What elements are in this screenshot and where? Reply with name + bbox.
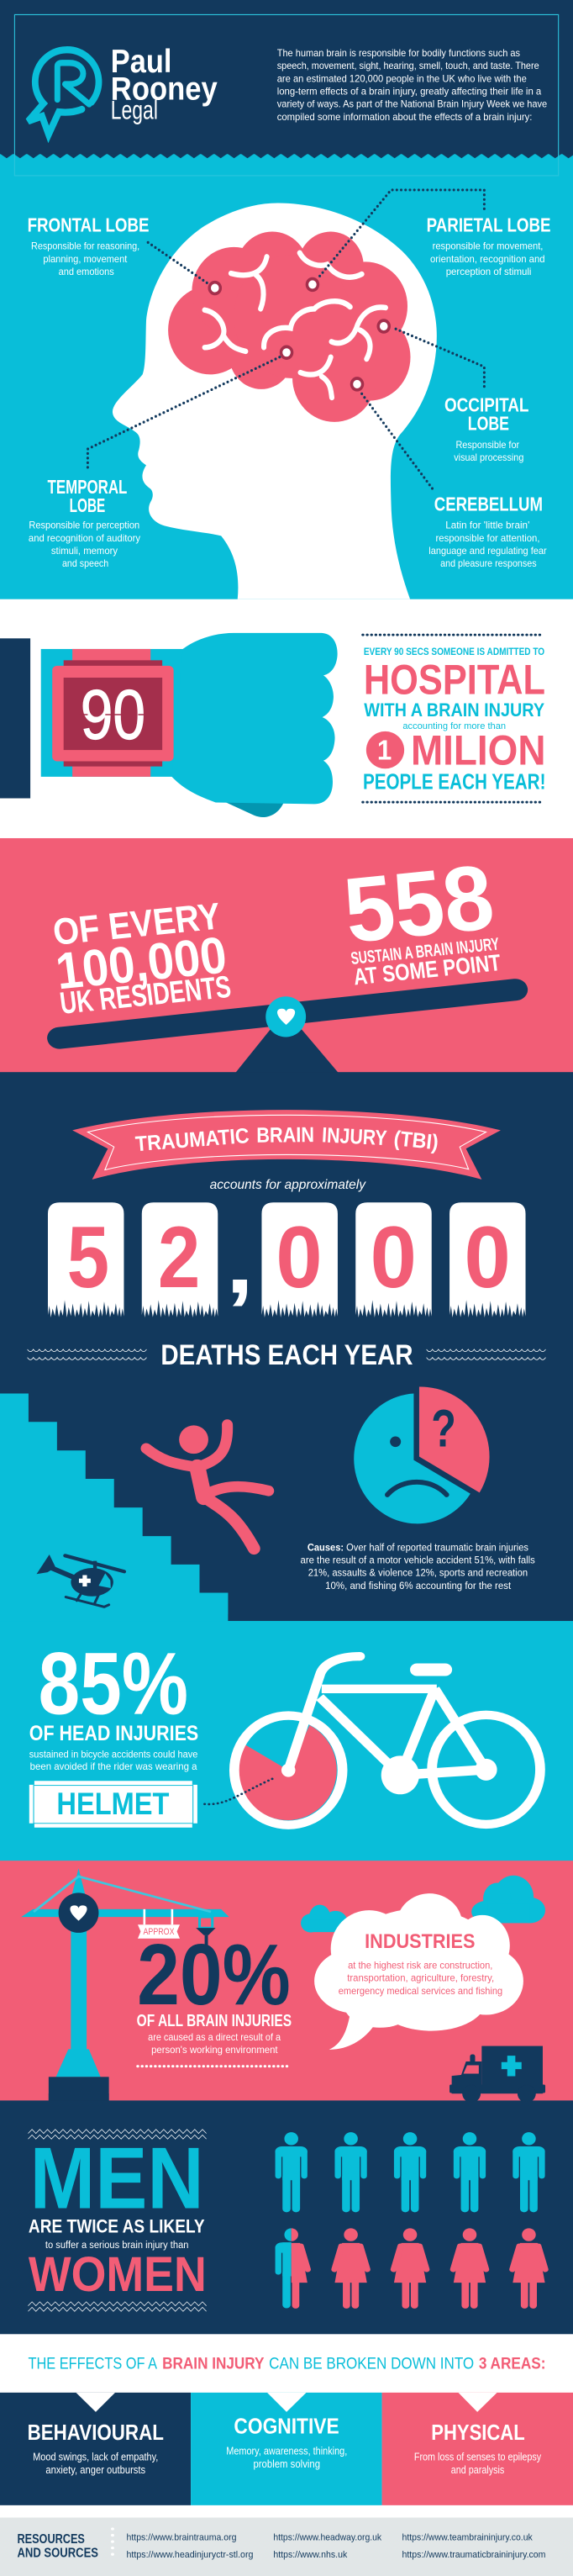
text: of every 100,000: UK RESIDENTS — [58, 969, 233, 1021]
number cards: 52,000: 0 — [276, 1208, 323, 1306]
label: frontal lobe: FRONTAL LOBE — [28, 214, 149, 236]
label: temporal lobe: LOBE — [70, 494, 105, 516]
stat: 20%: 20% — [137, 1926, 291, 2023]
label: cerebellum — [428, 493, 547, 569]
text: causes: are the result of a motor vehicle accident 51%, with falls — [301, 1555, 535, 1566]
panel: cognitive: COGNITIVE — [234, 2415, 339, 2438]
label: frontal lobe: planning, movement — [43, 254, 128, 265]
footer: resources and sources: RESOURCES — [17, 2531, 85, 2547]
banner title: BRAIN — [256, 1123, 314, 1148]
label: cerebellum: and pleasure responses — [440, 558, 537, 569]
helmet plaque: HELMET — [56, 1787, 169, 1821]
label: occipital lobe: visual processing — [454, 452, 523, 463]
label: cerebellum: Latin for 'little brain' — [445, 520, 529, 531]
label: cerebellum: responsible for attention, — [436, 533, 539, 544]
footer: resources and sources: https://www.nhs.uk — [273, 2549, 348, 2560]
logo — [28, 43, 218, 135]
brain folds — [205, 253, 386, 398]
number cards: 52,000 — [48, 1202, 526, 1317]
text block: hospital statistic: 1 — [377, 735, 392, 766]
intro text: The human brain is responsible for bodily functions such as — [277, 48, 520, 59]
company name: Rooney — [111, 71, 218, 107]
panel: physical: PHYSICAL — [431, 2420, 525, 2444]
panel: behavioural: BEHAVIOURAL — [28, 2420, 164, 2444]
subtitle: accounts for approximately — [210, 1178, 366, 1192]
text: 558: 558 — [339, 845, 499, 962]
speech bubble: industries: transportation, agriculture, forestry, — [347, 1972, 494, 1983]
label: temporal lobe: and speech — [62, 558, 108, 569]
panel: men vs women — [0, 2085, 573, 2576]
illustration: balance scale — [60, 990, 515, 1073]
label: occipital lobe: OCCIPITAL — [444, 393, 529, 416]
icon: falling person — [146, 1425, 269, 1549]
panel: hospital admissions and scale — [0, 633, 573, 1095]
text: causes: 10%, and fishing 6% accounting for the rest — [325, 1580, 512, 1592]
company name — [111, 43, 218, 125]
company name: Paul — [111, 43, 171, 79]
text: causes: Causes: Over half of reported traumatic brain injuries — [308, 1542, 528, 1553]
speech bubble: industries: INDUSTRIES — [365, 1931, 476, 1953]
panel: physical: and paralysis — [451, 2464, 504, 2476]
label: temporal lobe: Responsible for perception — [29, 520, 139, 531]
panel: physical — [382, 2393, 573, 2505]
heading: three areas: CAN BE BROKEN DOWN INTO — [269, 2355, 474, 2373]
icon: helicopter — [37, 1555, 124, 1607]
pictogram: women — [275, 2228, 545, 2309]
text: men twice as likely: to suffer a serious brain injury than — [45, 2239, 188, 2251]
icon: speech bubble logo — [28, 50, 99, 135]
stat: 85%: been avoided if the rider was wearing a — [30, 1761, 197, 1772]
banner title: (TBI) — [392, 1127, 439, 1154]
footer: resources and sources: https://www.headway.org.uk — [273, 2532, 382, 2542]
illustration: crane — [21, 1868, 229, 2101]
label: temporal lobe: and recognition of auditory — [29, 533, 140, 544]
number cards: 52,000: 0 — [371, 1208, 417, 1306]
label: temporal lobe: TEMPORAL — [48, 475, 127, 498]
stat: 20% — [137, 1926, 292, 2067]
panel: behavioural: anxiety, anger outbursts — [45, 2464, 145, 2476]
banner title: TRAUMATIC — [134, 1124, 250, 1156]
label: temporal lobe — [29, 475, 140, 569]
label: temporal lobe: stimuli, memory — [51, 546, 118, 557]
text block: hospital statistic — [363, 635, 545, 802]
watch digits: 90 — [81, 675, 145, 753]
label: occipital lobe: LOBE — [468, 412, 509, 435]
speech bubble: industries: emergency medical services and fishing — [339, 1986, 502, 1997]
number cards: 52,000: , — [226, 1214, 254, 1312]
text: men twice as likely — [28, 2130, 207, 2311]
banner title — [134, 1123, 439, 1156]
panel: behavioural: Mood swings, lack of empathy, — [33, 2452, 158, 2463]
panel: behavioural — [0, 2393, 191, 2505]
label: cerebellum: CEREBELLUM — [434, 493, 543, 515]
heading: three areas: THE EFFECTS OF A — [28, 2355, 157, 2373]
label: occipital lobe — [444, 393, 529, 463]
label: occipital lobe: Responsible for — [455, 440, 519, 451]
chart: sad pie — [354, 1387, 490, 1523]
text: of every 100,000: 100,000 — [53, 926, 230, 1000]
heading: three areas: BRAIN INJURY — [162, 2355, 265, 2373]
banner title: INJURY — [321, 1124, 387, 1150]
text: of every 100,000 — [50, 895, 233, 1021]
heading: three areas — [28, 2355, 545, 2373]
label: frontal lobe — [28, 214, 149, 277]
text: men twice as likely: ARE TWICE AS LIKELY — [29, 2216, 205, 2237]
panel: header and brain anatomy — [0, 0, 573, 599]
intro text: speech, movement, sight, hearing, smell, touch, and taste. There — [277, 61, 539, 71]
panel: traumatic brain injury — [0, 1076, 573, 1631]
panel background: residents — [0, 838, 573, 1073]
illustration: crane: APPROX — [144, 1926, 174, 1937]
panel: cognitive — [191, 2393, 382, 2505]
number cards: 52,000: 2 — [158, 1208, 200, 1306]
brain — [168, 232, 411, 422]
brain markers — [209, 279, 389, 390]
stat: 85%: sustained in bicycle accidents could have — [29, 1749, 197, 1760]
text: men twice as likely: MEN — [30, 2130, 204, 2227]
intro text: long-term effects of a brain injury, greatly affecting their life in a — [277, 86, 542, 98]
number cards: 52,000: 5 — [67, 1208, 109, 1306]
speech bubble: industries — [314, 1893, 523, 2050]
stat: 85%: 85% — [39, 1634, 188, 1733]
text: 558: AT SOME POINT — [352, 950, 502, 990]
stat: 20%: OF ALL BRAIN INJURIES — [137, 2011, 292, 2030]
panel: cognitive: problem solving — [253, 2458, 320, 2470]
heading: three areas: 3 AREAS: — [479, 2355, 545, 2373]
heading: deaths each year — [28, 1339, 545, 1371]
footer: resources and sources — [0, 2517, 573, 2576]
label: parietal lobe: perception of stimuli — [446, 267, 531, 277]
banner ribbon — [72, 1110, 501, 1180]
label: parietal lobe: orientation, recognition and — [430, 254, 545, 265]
intro text: compiled some information about the effects of a brain injury: — [277, 112, 532, 123]
icon: clouds — [301, 1876, 545, 1932]
stat: 85% — [29, 1634, 198, 1772]
label: parietal lobe — [427, 214, 551, 277]
label: frontal lobe: and emotions — [59, 267, 114, 277]
stat: 20%: are caused as a direct result of a — [148, 2032, 281, 2043]
intro text: are an estimated 120,000 people in the UK who live with the — [277, 73, 527, 84]
text block: hospital statistic: accounting for more than — [402, 721, 506, 731]
icon: bicycle — [234, 1656, 540, 1825]
footer: resources and sources: AND SOURCES — [17, 2545, 98, 2560]
stairs — [0, 1394, 573, 1631]
dotted connectors — [87, 190, 484, 491]
text: causes: 21%, assaults & violence 12%, sports and recreation — [308, 1567, 528, 1579]
text: causes — [301, 1542, 535, 1592]
chart: sad pie: ? — [431, 1399, 456, 1458]
label: parietal lobe: PARIETAL LOBE — [427, 214, 551, 236]
label: parietal lobe: responsible for movement, — [433, 240, 543, 252]
intro text — [277, 48, 547, 123]
panel: bicycle helmets and workplace — [0, 1614, 573, 2120]
illustration: arm with watch — [0, 633, 338, 817]
text: men twice as likely: WOMEN — [29, 2246, 207, 2302]
text: of every 100,000: OF EVERY — [50, 895, 223, 953]
intro text: variety of ways. As part of the National Brain Injury Week we have — [277, 98, 547, 110]
pictogram: men — [276, 2132, 545, 2212]
company name: Legal — [111, 96, 158, 125]
footer: resources and sources: https://www.headinjuryctr-stl.org — [127, 2549, 254, 2560]
ambulance wheels overlap — [49, 2085, 536, 2102]
icon: ambulance — [449, 2046, 545, 2103]
number cards: 52,000: 0 — [464, 1208, 511, 1306]
footer: resources and sources: https://www.teambraininjury.co.uk — [402, 2532, 533, 2542]
speech bubble: industries: at the highest risk are construction, — [348, 1960, 492, 1971]
panel: cognitive: Memory, awareness, thinking, — [226, 2446, 347, 2457]
helmet plaque — [29, 1781, 197, 1828]
label: frontal lobe: Responsible for reasoning, — [31, 240, 139, 252]
dotted connector — [205, 1777, 275, 1804]
stat: 20%: person's working environment — [151, 2045, 278, 2056]
stat: 85%: OF HEAD INJURIES — [29, 1722, 198, 1745]
heading: deaths each year: DEATHS EACH YEAR — [160, 1339, 413, 1371]
head silhouette — [113, 203, 437, 599]
footer: resources and sources: https://www.braintrauma.org — [127, 2532, 236, 2542]
label: cerebellum: language and regulating fear — [428, 546, 547, 557]
